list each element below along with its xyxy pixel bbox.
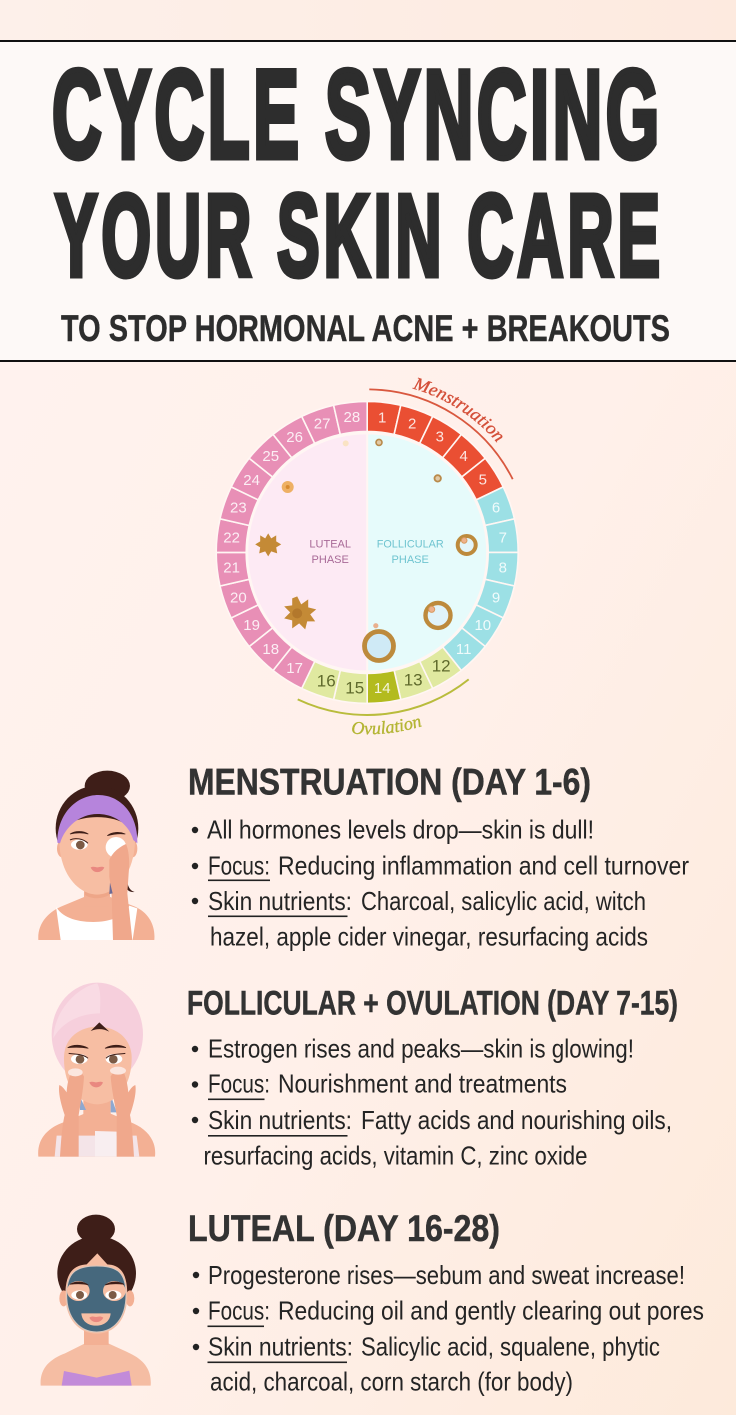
follicular phase label: PHASE [392, 554, 429, 566]
day numbers: 25 [262, 448, 279, 465]
day numbers: 13 [404, 670, 423, 689]
day numbers: 10 [474, 617, 491, 634]
day numbers: 16 [317, 671, 336, 690]
body text [208, 1260, 704, 1396]
luteal phase label [309, 538, 351, 566]
section: luteal [188, 1208, 704, 1396]
body text: Nourishment and treatments [278, 1068, 567, 1098]
day numbers: 3 [436, 428, 444, 445]
body text: Focus: [208, 1296, 270, 1326]
day numbers: 17 [286, 660, 303, 677]
day numbers: 7 [499, 529, 507, 546]
title panel [0, 40, 736, 362]
day numbers: 12 [432, 656, 451, 675]
day numbers: 28 [344, 409, 360, 426]
day numbers: 9 [492, 589, 500, 606]
corpus luteum stages [255, 440, 349, 629]
follicular phase label [377, 538, 444, 566]
day numbers: 11 [456, 641, 471, 658]
body text: Fatty acids and nourishing oils, [361, 1105, 672, 1135]
day numbers: 19 [243, 617, 260, 634]
top strip [0, 0, 736, 41]
body text [207, 814, 689, 952]
bullets [192, 1046, 198, 1123]
day numbers: 2 [408, 415, 416, 432]
day segments [213, 398, 522, 707]
follicular phase label: FOLLICULAR [377, 538, 444, 550]
day numbers: 27 [314, 416, 330, 433]
day numbers: 23 [230, 499, 247, 516]
day numbers: 21 [223, 559, 240, 576]
body text: All hormones levels drop—skin is dull! [207, 814, 594, 844]
body text: Estrogen rises and peaks—skin is glowing! [208, 1034, 634, 1064]
day numbers: 1 [378, 409, 386, 426]
day numbers: 18 [262, 641, 279, 658]
day numbers: 8 [499, 559, 507, 576]
day numbers: 15 [345, 678, 364, 697]
portrait: charcoal face mask [41, 1215, 151, 1386]
body text [204, 1034, 672, 1170]
luteal phase label: PHASE [312, 554, 349, 566]
day numbers: 24 [243, 472, 260, 489]
day numbers: 14 [374, 680, 391, 697]
follicles [364, 439, 476, 660]
day numbers: 5 [479, 471, 487, 488]
cycle wheel [217, 378, 519, 735]
menstruation label: Menstruation [412, 378, 502, 442]
body text: Salicylic acid, squalene, phytic [361, 1332, 660, 1362]
bullets [192, 827, 198, 904]
section: follicular and ovulation [187, 984, 678, 1170]
day numbers: 6 [492, 499, 500, 516]
body text: acid, charcoal, corn starch (for body) [210, 1366, 573, 1396]
section: menstruation [188, 762, 689, 952]
body text: resurfacing acids, vitamin C, zinc oxide [204, 1140, 588, 1170]
day numbers: 20 [230, 589, 247, 606]
heading: menstruation: MENSTRUATION (DAY 1-6) [188, 762, 591, 802]
day numbers: 22 [223, 529, 240, 546]
body text: Focus: [208, 1068, 270, 1098]
day numbers: 4 [460, 448, 468, 465]
body text: Skin nutrients: [208, 1332, 353, 1362]
menstruation arc [369, 389, 513, 479]
ovulation label: Ovulation [352, 718, 422, 735]
luteal half disc [248, 434, 366, 670]
title line 2: YOUR SKIN CARE [55, 170, 660, 300]
title line 1: CYCLE SYNCING [52, 46, 659, 185]
bullets [193, 1272, 199, 1350]
body text: Focus: [208, 850, 270, 880]
portrait: cleansing with cotton pad [38, 771, 154, 940]
body text: Reducing inflammation and cell turnover [278, 850, 689, 880]
body text: Skin nutrients: [208, 886, 352, 916]
portrait: towel wrap applying cream [38, 983, 155, 1157]
body text: Skin nutrients: [208, 1105, 352, 1135]
day numbers: 26 [286, 429, 303, 446]
ovulation arc [298, 679, 469, 715]
day numbers [223, 409, 507, 697]
heading: luteal: LUTEAL (DAY 16-28) [188, 1208, 500, 1249]
follicular half disc [368, 434, 486, 670]
luteal phase label: LUTEAL [309, 538, 351, 550]
body text: Charcoal, salicylic acid, witch [361, 886, 646, 916]
body text: hazel, apple cider vinegar, resurfacing acids [210, 922, 648, 952]
